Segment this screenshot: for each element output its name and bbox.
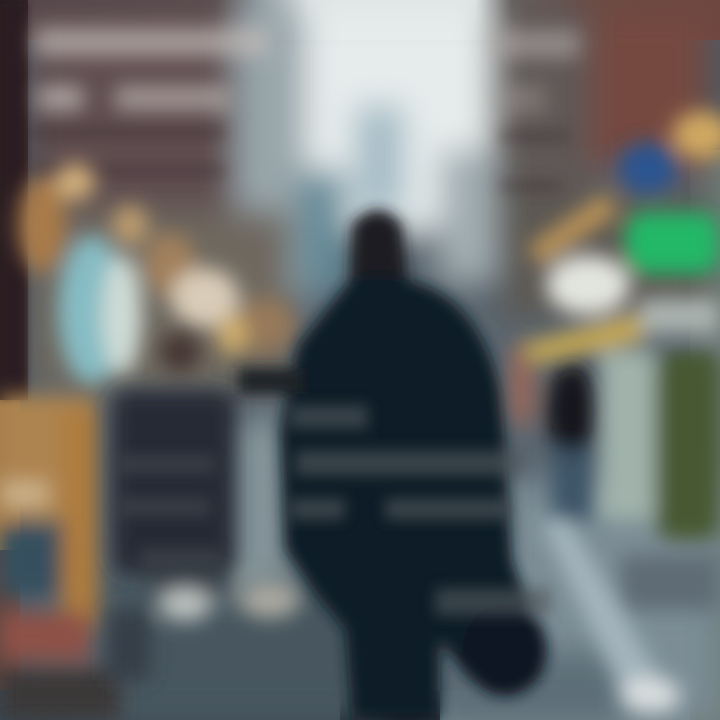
pedestrian at right	[509, 340, 598, 520]
blurred heading text top left	[35, 28, 580, 113]
blurred caption lines over child	[120, 455, 220, 566]
building window rows	[30, 125, 570, 192]
light street marking	[540, 520, 680, 713]
street ground	[100, 420, 720, 720]
left dark pillar	[0, 0, 26, 400]
blurred caption lines over the man	[290, 405, 550, 616]
child figure	[108, 332, 300, 680]
right side signs and car	[522, 111, 720, 610]
central man silhouette	[238, 210, 547, 720]
crowd on the left	[18, 163, 295, 385]
orange figure bottom left	[0, 395, 120, 720]
